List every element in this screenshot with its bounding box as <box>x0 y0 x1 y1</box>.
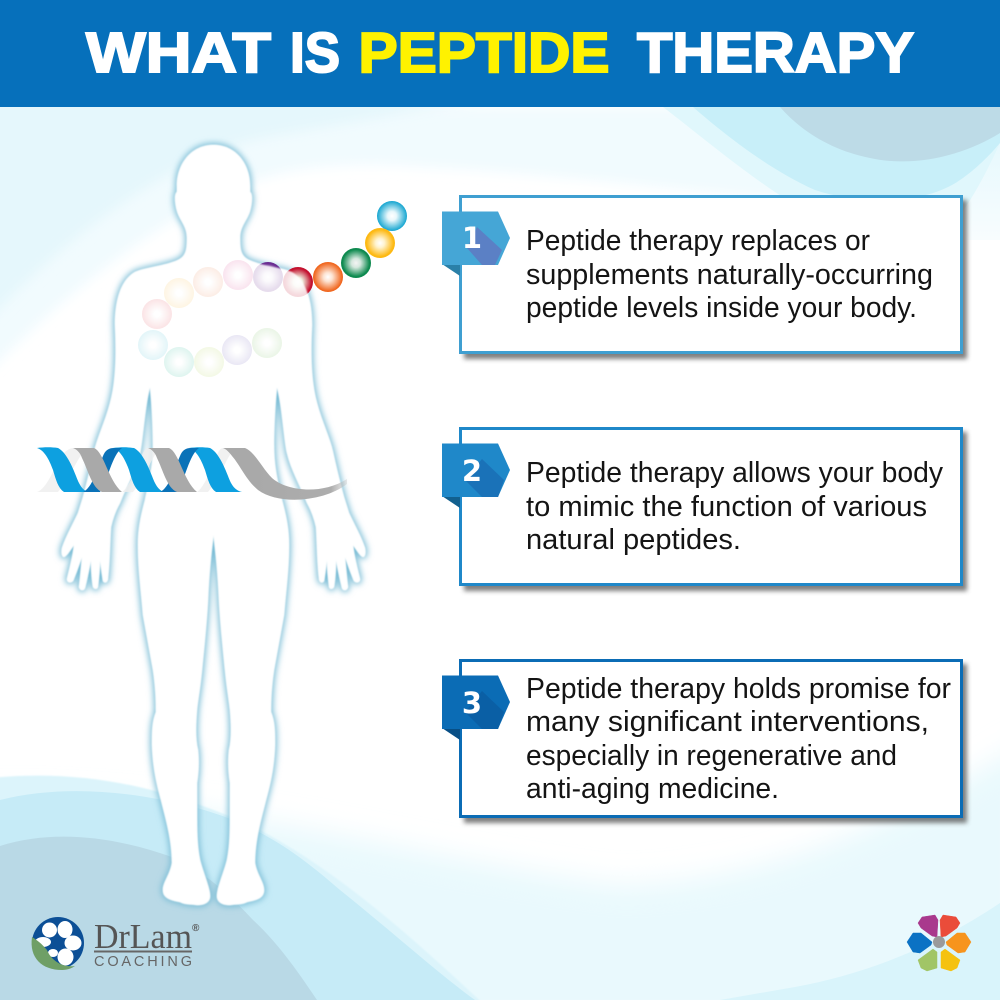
logo wordmark: DrLam <box>94 917 192 956</box>
text 2 <box>526 457 943 556</box>
amino-acid bead chain <box>138 201 407 377</box>
callout 2 <box>442 428 967 591</box>
flag 3 <box>442 676 510 740</box>
flag 3: 3 <box>462 686 482 720</box>
text 2: to mimic the function of various <box>526 491 927 523</box>
registered mark: ® <box>192 923 200 934</box>
text 3: Peptide therapy holds promise for <box>526 673 951 705</box>
text 1 <box>526 225 933 324</box>
box 3 frame <box>460 660 967 823</box>
flag 1: 1 <box>462 221 482 255</box>
box 1 frame <box>460 196 967 359</box>
title: THERAPY <box>637 21 914 85</box>
DNA helix <box>37 447 347 500</box>
background wave: bottom left <box>0 776 490 1000</box>
text 3: especially in regenerative and <box>526 740 897 772</box>
icon: color flower <box>907 915 971 971</box>
logo subtitle: COACHING <box>94 954 192 970</box>
title: PEPTIDE <box>358 21 610 85</box>
text 3: many significant interventions, <box>526 706 929 738</box>
logo emblem <box>32 917 84 970</box>
background wave: top right <box>663 107 1000 240</box>
flag 2 <box>442 444 510 508</box>
title <box>86 21 914 85</box>
callout 1 <box>442 196 967 359</box>
text 1: supplements naturally-occurring <box>526 259 933 291</box>
title: WHAT <box>86 21 271 85</box>
callout 3 <box>442 660 967 823</box>
logo: DrLam Coaching <box>32 917 200 970</box>
text 2: Peptide therapy allows your body <box>526 457 943 489</box>
text 2: natural peptides. <box>526 524 741 556</box>
box 2 frame <box>460 428 967 591</box>
body silhouette <box>62 145 407 905</box>
text 1: peptide levels inside your body. <box>526 292 917 324</box>
text 3: anti-aging medicine. <box>526 773 779 805</box>
logo rule <box>94 950 192 952</box>
header banner <box>0 0 1000 107</box>
text 3 <box>526 673 951 805</box>
title: IS <box>290 21 340 85</box>
text 1: Peptide therapy replaces or <box>526 225 870 257</box>
flag 2: 2 <box>462 454 482 488</box>
flag 1 <box>442 212 510 276</box>
